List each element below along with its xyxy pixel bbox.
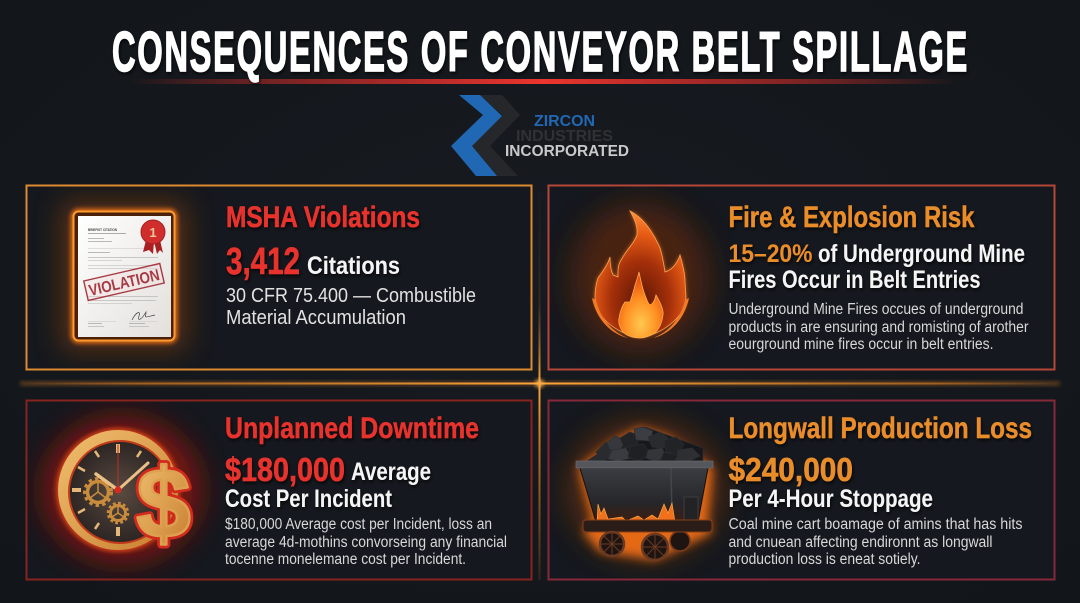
stat: Cost Per Incident bbox=[225, 485, 393, 513]
front wheels bbox=[600, 532, 668, 560]
heading: Unplanned Downtime bbox=[225, 412, 479, 445]
description: production loss is eneat sotiely. bbox=[728, 551, 920, 568]
panel: longwall production loss bbox=[548, 400, 1054, 580]
panel frame bbox=[548, 186, 1054, 370]
stat bbox=[728, 451, 933, 513]
dollar sign: $ bbox=[136, 448, 191, 558]
coal pile bbox=[587, 427, 703, 461]
heading: Fire & Explosion Risk bbox=[728, 201, 975, 234]
logo: Zircon Industries Incorporated bbox=[451, 95, 629, 176]
stat: Citations bbox=[307, 252, 400, 280]
flame inner tongue bbox=[619, 272, 663, 338]
gears bbox=[84, 478, 128, 523]
cart rim bbox=[576, 461, 713, 468]
flames bbox=[597, 503, 675, 522]
chassis bbox=[583, 520, 712, 532]
stat: 15–20% bbox=[728, 240, 812, 268]
description: Material Accumulation bbox=[226, 306, 406, 329]
description: 30 CFR 75.400 — Combustible bbox=[226, 284, 476, 307]
stat bbox=[728, 240, 1025, 294]
description: Underground Mine Fires occues of underground bbox=[728, 301, 1024, 318]
violation stamp: VIOLATION bbox=[87, 267, 161, 300]
logo dark chevron bbox=[472, 95, 520, 176]
logo word: Industries: INDUSTRIES bbox=[516, 128, 613, 145]
panel frame bbox=[26, 186, 532, 370]
panel: unplanned downtime bbox=[26, 400, 532, 580]
description bbox=[225, 516, 507, 568]
heading: MSHA Violations bbox=[226, 201, 420, 234]
description: Coal mine cart boamage of amins that has hits bbox=[728, 516, 1023, 533]
stat bbox=[226, 241, 400, 283]
description: tocenne monelemane cost per Incident. bbox=[225, 551, 466, 568]
flame lower crescents bbox=[592, 298, 689, 338]
stat: $240,000 bbox=[728, 451, 853, 488]
stat: $180,000 bbox=[225, 451, 345, 488]
icon: violation document bbox=[62, 202, 186, 350]
description bbox=[728, 516, 1023, 568]
stat: of Underground Mine bbox=[818, 240, 1025, 268]
panel: fire and explosion risk bbox=[548, 186, 1054, 370]
ribbon seal bbox=[141, 220, 165, 254]
title underline bbox=[128, 79, 958, 84]
cross divider bbox=[20, 185, 1060, 580]
icon: violation document: BRIEFIST CITATION bbox=[88, 227, 117, 232]
cart body bbox=[580, 468, 708, 522]
logo word: Incorporated: INCORPORATED bbox=[505, 143, 629, 160]
description bbox=[226, 284, 476, 329]
panel frame bbox=[548, 400, 1054, 580]
logo blue chevron bbox=[451, 95, 502, 176]
stat bbox=[225, 451, 431, 513]
icon: clock and dollar bbox=[42, 416, 202, 564]
ribbon seal: 1 bbox=[149, 225, 157, 240]
icon: flame bbox=[570, 202, 710, 354]
stat: 3,412 bbox=[226, 241, 300, 283]
icon: coal mine cart bbox=[567, 420, 723, 560]
clock ticks bbox=[72, 444, 141, 536]
description: average 4d-mothins convorseing any financial bbox=[225, 534, 507, 551]
stat: Per 4-Hour Stoppage bbox=[728, 485, 933, 513]
logo word: Zircon: ZIRCON bbox=[534, 113, 595, 130]
description: products in are ensuring and romisting of arother bbox=[728, 319, 1028, 336]
description: $180,000 Average cost per Incident, loss an bbox=[225, 516, 492, 533]
description: and cnuean affecting endironnt as longwall bbox=[728, 534, 992, 551]
description bbox=[728, 301, 1028, 353]
panel frame bbox=[26, 400, 532, 580]
dollar sign face: $ bbox=[136, 448, 191, 558]
clock hands bbox=[96, 445, 148, 490]
panel: MSHA violations bbox=[26, 186, 532, 370]
description: eourground mine fires occur in belt entries. bbox=[728, 336, 994, 353]
stat: Fires Occur in Belt Entries bbox=[728, 266, 980, 294]
wheel rear bbox=[670, 531, 690, 551]
stat: Average bbox=[351, 458, 431, 486]
